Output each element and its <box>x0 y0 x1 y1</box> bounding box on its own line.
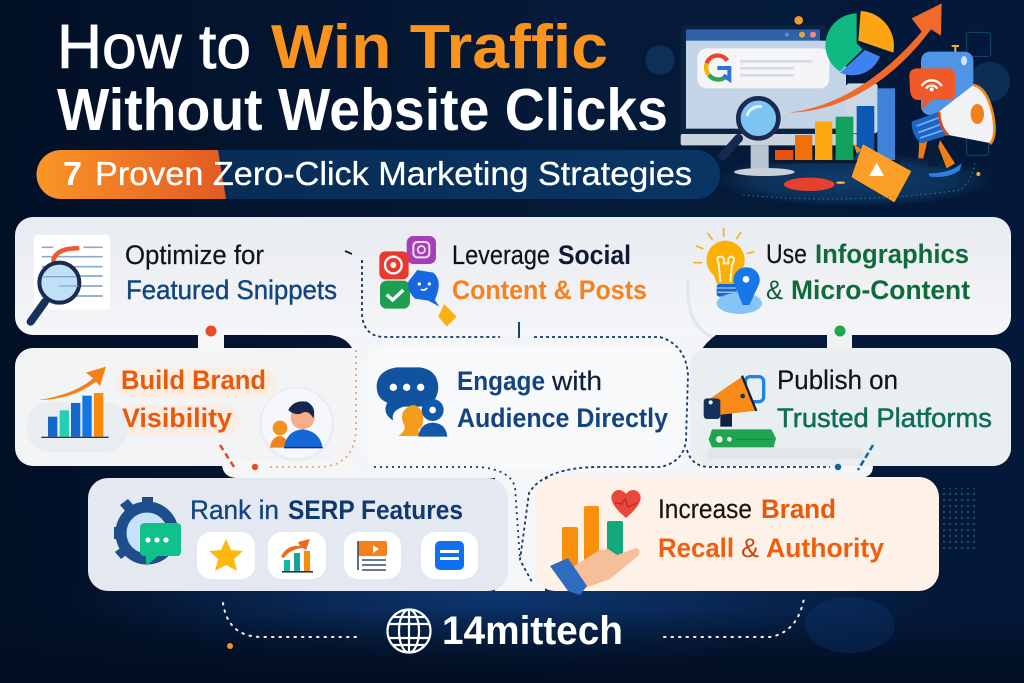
pie chart <box>825 11 894 75</box>
connector dots <box>227 464 841 649</box>
icon: document with magnifier <box>31 235 110 322</box>
icon: chat and people <box>377 367 447 437</box>
heading <box>457 366 668 433</box>
heading <box>766 239 970 305</box>
brand logo <box>388 609 623 653</box>
icon: hand with bars and heart <box>550 490 641 595</box>
heading: Engage <box>457 366 545 396</box>
red disc <box>784 178 845 191</box>
heading: Publish on <box>777 365 898 395</box>
heading <box>777 365 992 433</box>
heading: Featured Snippets <box>126 275 337 305</box>
dot pattern <box>941 488 975 550</box>
heading <box>452 240 647 305</box>
title: Without Website Clicks <box>57 77 668 143</box>
heading: SERP Features <box>288 495 463 525</box>
heading <box>125 240 337 305</box>
icon: blue list tile <box>421 532 478 579</box>
icon: article tile <box>344 532 401 579</box>
title: How to <box>57 13 251 82</box>
heading <box>190 495 463 525</box>
highlights <box>27 368 276 452</box>
panel: engage with audience <box>377 366 668 437</box>
icon: gear and chat <box>114 497 181 566</box>
play tag <box>853 143 910 201</box>
monitor <box>681 25 878 176</box>
panel: build brand visibility <box>27 365 334 461</box>
heading: Visibility <box>122 403 232 433</box>
panel: optimize for featured snippets <box>31 235 337 322</box>
heading: Recall <box>658 533 734 563</box>
heading: Use <box>766 239 807 269</box>
heading <box>658 494 884 563</box>
icon: star tile <box>197 532 255 579</box>
connector: green dot <box>834 326 846 336</box>
subtitle pill: 7 <box>63 155 82 192</box>
panel: increase brand recall <box>535 477 939 595</box>
heading: with <box>551 366 602 396</box>
subtitle pill: Proven Zero-Click Marketing Strategies <box>95 155 692 192</box>
icon: growth chart tile <box>268 532 326 579</box>
megaphone and chat <box>909 45 995 177</box>
wordmark: 14mittech <box>442 609 623 653</box>
growth arrow <box>789 3 942 113</box>
hero illustration <box>645 3 1010 207</box>
panel: leverage social content <box>379 236 647 327</box>
panel: rank in serp features <box>88 478 508 591</box>
heading: Increase <box>658 494 752 524</box>
icon: social apps <box>379 236 457 327</box>
heading: Leverage <box>452 240 550 270</box>
heading: Social <box>558 240 631 270</box>
icon: globe <box>388 610 430 652</box>
white card base <box>15 217 1011 591</box>
heading: & <box>741 533 759 563</box>
heading: Micro-Content <box>791 275 970 305</box>
icon: person <box>259 387 334 461</box>
bar chart <box>772 88 900 163</box>
icon: megaphone on stand <box>704 376 864 459</box>
subtitle pill <box>36 150 720 199</box>
title: Win Traffic <box>271 13 608 82</box>
icon: growth bars <box>38 367 109 438</box>
heading: Brand <box>761 494 836 524</box>
heading: Audience Directly <box>457 403 668 433</box>
heading: Optimize for <box>125 240 264 270</box>
connectors: dotted lines <box>220 251 873 637</box>
heading: Infographics <box>815 239 969 269</box>
heading: Rank in <box>190 495 279 525</box>
panel: publish on trusted platforms <box>704 365 992 459</box>
heading: Build Brand <box>121 365 266 395</box>
heading: & <box>766 275 783 305</box>
panel: use infographics <box>694 228 970 314</box>
icon: lightbulb <box>694 228 762 314</box>
heading: Content & Posts <box>452 275 647 305</box>
magnifier <box>723 98 778 156</box>
title <box>57 13 668 143</box>
heading: Trusted Platforms <box>777 403 992 433</box>
heading <box>121 365 266 433</box>
connector: red dot <box>206 326 216 336</box>
heading: Authority <box>766 533 884 563</box>
